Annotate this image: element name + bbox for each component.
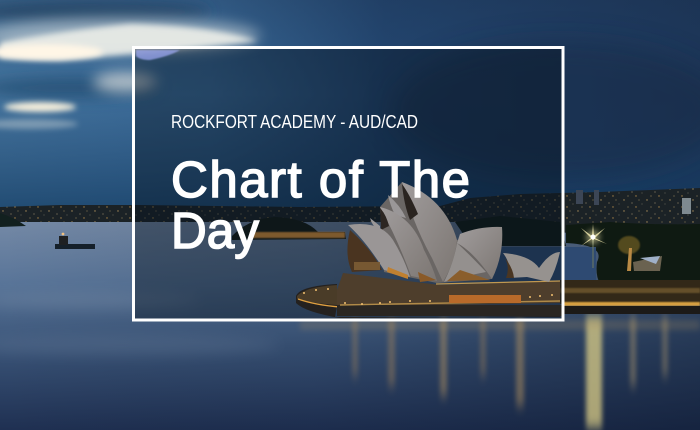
right shore promenade (560, 280, 700, 314)
far shoreline and city (0, 188, 700, 250)
opera house platform (296, 284, 562, 318)
opera house middle sail (380, 207, 437, 281)
white frame (134, 48, 563, 320)
translucent dark panel inside the frame (134, 48, 563, 320)
water (0, 222, 700, 430)
opera house front sail (348, 224, 410, 277)
title (171, 151, 470, 259)
title: Chart of The (171, 151, 470, 208)
title: Day (171, 202, 259, 259)
subtitle: ROCKFORT ACADEMY - AUD/CAD (171, 112, 418, 132)
clouds (0, 18, 260, 129)
opera house right sail (457, 227, 502, 279)
opera house small sails (503, 252, 560, 282)
sky background (0, 0, 700, 210)
Sydney Opera House (296, 182, 562, 318)
opera house sail backing (380, 182, 502, 283)
opera house main sail (402, 182, 457, 282)
middle island with orange lights (232, 217, 346, 240)
panel corner cloud highlight (136, 50, 180, 60)
water light reflections (300, 316, 700, 428)
water behind the small sails (490, 247, 596, 283)
small fort island boat (55, 233, 95, 249)
opera house rear sails (388, 195, 406, 218)
dark trees on the right headland (566, 222, 700, 292)
opera house podium (337, 273, 560, 307)
dark trees behind the opera house (455, 216, 566, 246)
opera house lit foyers (387, 267, 408, 279)
star light and lit tree (581, 224, 662, 271)
